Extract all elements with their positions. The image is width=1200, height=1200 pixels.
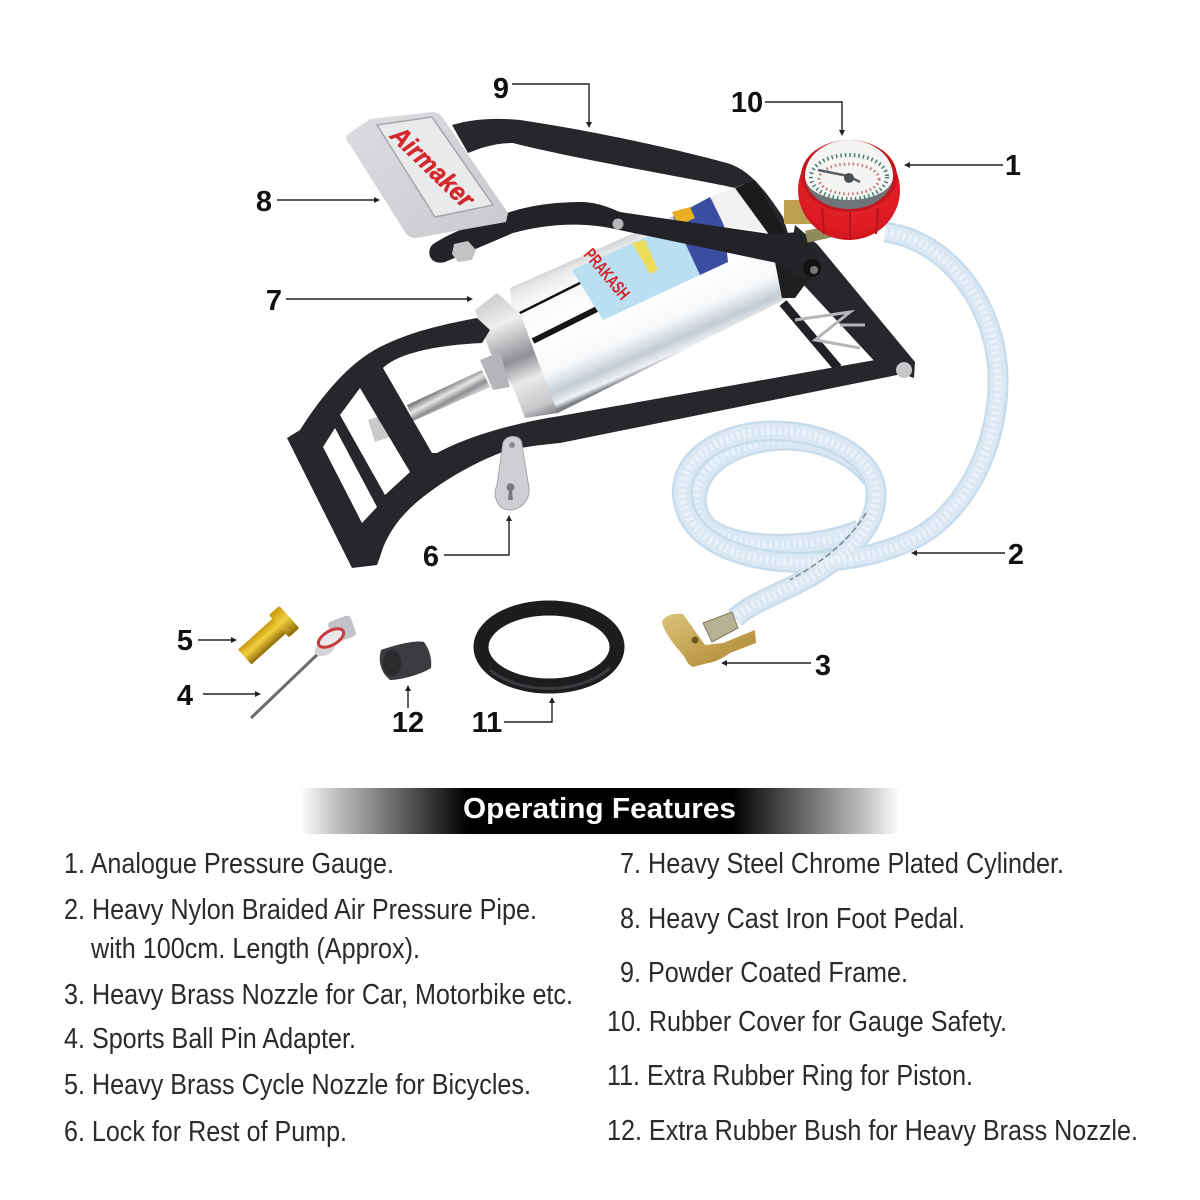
callout 12 bbox=[392, 685, 424, 739]
feature list: left column bbox=[64, 848, 573, 1148]
label brand text: PRAKASH bbox=[580, 245, 634, 304]
hose print line bbox=[790, 513, 866, 580]
callout 3 bbox=[721, 650, 831, 682]
callout 8: 8 bbox=[256, 186, 272, 218]
part 12: rubber bush bbox=[380, 642, 431, 680]
callout 12: 12 bbox=[392, 707, 424, 739]
callout 7 bbox=[266, 285, 473, 317]
feature list: left column: 1. Analogue Pressure Gauge. bbox=[64, 848, 394, 880]
callout 4: 4 bbox=[177, 680, 193, 712]
callout 1: 1 bbox=[1005, 150, 1021, 182]
callout 4 bbox=[177, 680, 261, 712]
frame: right leg bbox=[788, 225, 915, 378]
air hose coil inner strand bbox=[696, 440, 872, 545]
spring clip bbox=[795, 312, 865, 348]
cylinder end cap bbox=[475, 293, 558, 418]
feature list: left column: 4. Sports Ball Pin Adapter. bbox=[64, 1023, 356, 1055]
part 11: rubber ring bbox=[481, 608, 617, 689]
part 5: brass cycle nozzle bbox=[235, 606, 299, 668]
feature list: right column: 10. Rubber Cover for Gauge Safety. bbox=[607, 1006, 1007, 1038]
callout 11: 11 bbox=[472, 707, 502, 739]
frame: front arch, ladder and base rail bbox=[287, 318, 912, 568]
cylinder bbox=[475, 184, 792, 418]
feature list: right column: 11. Extra Rubber Ring for Piston. bbox=[607, 1060, 973, 1092]
piston rod bbox=[368, 352, 510, 442]
callout 9: 9 bbox=[493, 73, 509, 105]
feature list: left column: 5. Heavy Brass Cycle Nozzle for Bicycles. bbox=[64, 1069, 531, 1101]
callout 5 bbox=[177, 625, 237, 657]
pivot block bbox=[775, 262, 812, 298]
callout 8 bbox=[256, 186, 380, 218]
feature list: right column bbox=[607, 848, 1138, 1147]
feature list: right column: 12. Extra Rubber Bush for Heavy Brass Nozzle. bbox=[607, 1115, 1138, 1147]
callout 2 bbox=[911, 539, 1024, 571]
callout 1 bbox=[904, 150, 1021, 182]
callout 6 bbox=[423, 515, 512, 573]
pedal bolt bbox=[452, 241, 476, 262]
feature list: left column: with 100cm. Length (Approx). bbox=[90, 933, 420, 965]
air hose main bbox=[682, 232, 998, 618]
callout 3: 3 bbox=[815, 650, 831, 682]
part 4: ball pin adapter bbox=[251, 615, 357, 718]
heading band: Operating Features bbox=[463, 793, 736, 825]
callout 10 bbox=[731, 87, 845, 136]
cylinder label bbox=[572, 215, 728, 320]
frame: upper pedal arm bbox=[452, 119, 790, 240]
callout 7: 7 bbox=[266, 285, 282, 317]
frame: lower pedal arm bbox=[429, 202, 820, 278]
frame: cross strut bbox=[783, 303, 838, 368]
callout 6: 6 bbox=[423, 541, 439, 573]
feature list: right column: 8. Heavy Cast Iron Foot Pedal. bbox=[620, 903, 965, 935]
feature list: right column: 9. Powder Coated Frame. bbox=[620, 957, 908, 989]
callout 9 bbox=[493, 73, 592, 128]
part 3: brass nozzle bbox=[662, 612, 756, 667]
foot pedal bbox=[346, 112, 508, 238]
pedal brand text: Airmaker bbox=[384, 119, 482, 215]
feature list: right column: 7. Heavy Steel Chrome Plated Cylinder. bbox=[620, 848, 1064, 880]
cylinder reflection lines bbox=[500, 282, 582, 323]
base bolt bbox=[896, 362, 912, 378]
feature list: left column: 3. Heavy Brass Nozzle for Car, Motorbike etc. bbox=[64, 979, 573, 1011]
callout 2: 2 bbox=[1008, 539, 1024, 571]
pivot rivets bbox=[612, 218, 821, 277]
brass connector bbox=[784, 200, 833, 243]
callout 10: 10 bbox=[731, 87, 763, 119]
callout 5: 5 bbox=[177, 625, 193, 657]
feature list: left column: 6. Lock for Rest of Pump. bbox=[64, 1116, 347, 1148]
heading band bbox=[300, 788, 900, 834]
arm slot shadow bbox=[735, 180, 790, 240]
callout 11 bbox=[472, 697, 555, 739]
lock bracket bbox=[495, 436, 529, 510]
feature list: left column: 2. Heavy Nylon Braided Air Pressure Pipe. bbox=[64, 894, 537, 926]
pressure gauge bbox=[798, 140, 900, 240]
